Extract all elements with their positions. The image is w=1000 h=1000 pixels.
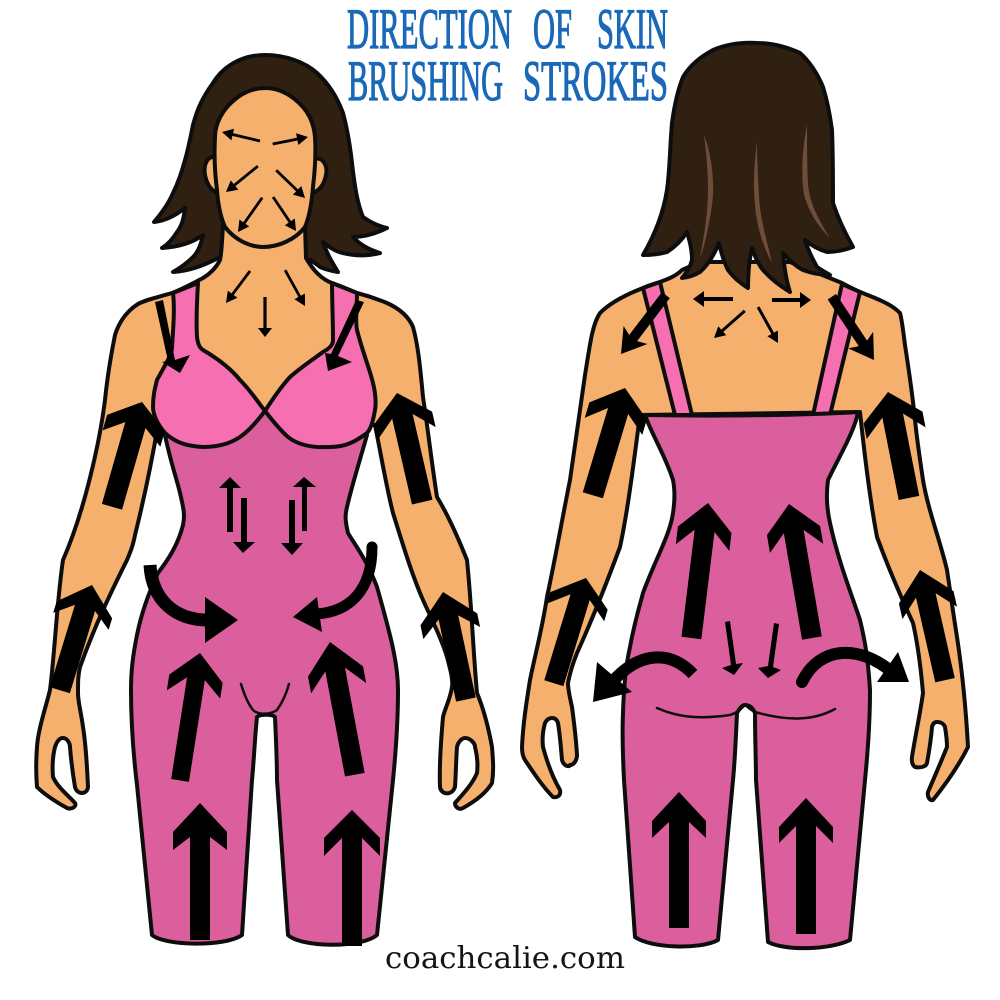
arrow: mid back right (762, 499, 839, 643)
front bra and straps (153, 283, 376, 447)
face arrow 4 (272, 166, 309, 202)
back arrows (525, 286, 972, 934)
shoulder arrow right (819, 288, 886, 368)
torso arrow up left (219, 477, 241, 532)
title: STROKES (523, 50, 668, 113)
arrow: right leg (779, 798, 833, 934)
upper back arrow left (693, 291, 733, 307)
neck arrow centre (258, 297, 272, 337)
upper back arrow lower left (710, 306, 749, 343)
arrow: right forearm (415, 586, 494, 706)
upper back arrow right (772, 292, 811, 308)
title (347, 0, 668, 113)
front crotch line (241, 684, 289, 714)
back buttock lines (657, 705, 835, 718)
back left strap (643, 282, 692, 415)
shoulder arrow left (609, 286, 678, 363)
front face (215, 88, 315, 247)
arrow: right upper arm (859, 386, 938, 504)
face arrow 5 (233, 194, 267, 235)
front ears (205, 157, 326, 193)
upper back arrow lower right (753, 304, 783, 346)
arrow: right upper arm (368, 386, 451, 509)
face arrow 1 (221, 126, 261, 147)
arrow: left forearm (32, 577, 120, 699)
arrow: right lower leg (324, 810, 380, 946)
curved arrow: right hip (293, 547, 372, 632)
back suit (623, 412, 870, 948)
front suit body (131, 410, 398, 945)
torso arrow down right (281, 500, 303, 555)
front body skin (36, 225, 493, 809)
face arrow 2 (272, 131, 309, 150)
arrow: left forearm (525, 569, 615, 692)
arrow: mid back left (665, 500, 735, 641)
torso arrow down left (233, 498, 255, 553)
arrow: left upper arm (564, 379, 654, 504)
strap arrow right (325, 300, 364, 371)
title: BRUSHING (348, 50, 503, 113)
front hair (154, 55, 387, 272)
lower back arrow left (722, 621, 743, 675)
strap arrow left (155, 300, 190, 373)
front arrows (32, 126, 494, 946)
back right strap (813, 284, 860, 415)
back body skin (522, 262, 968, 800)
lower back arrow right (758, 623, 781, 678)
arrow: right upper thigh (302, 637, 382, 780)
neck arrow left (221, 267, 255, 307)
arrow: left lower leg (173, 803, 227, 940)
face arrow 3 (222, 161, 262, 197)
front figure (36, 55, 493, 945)
curved arrow: left hip (150, 565, 238, 643)
curved arrow: left buttock (593, 657, 693, 702)
website credit: coachcalie.com (385, 941, 625, 976)
arrow: left leg (652, 792, 706, 928)
curved arrow: right buttock (802, 652, 909, 682)
back figure (522, 43, 968, 948)
arrow: left upper arm (83, 394, 171, 515)
arrow: right forearm (893, 564, 972, 686)
back hair highlights (700, 125, 830, 263)
neck arrow right (280, 267, 310, 309)
arrow: left upper thigh (153, 649, 227, 785)
face arrow 6 (268, 194, 301, 234)
back hair (643, 43, 853, 292)
torso arrow up right (293, 477, 316, 531)
